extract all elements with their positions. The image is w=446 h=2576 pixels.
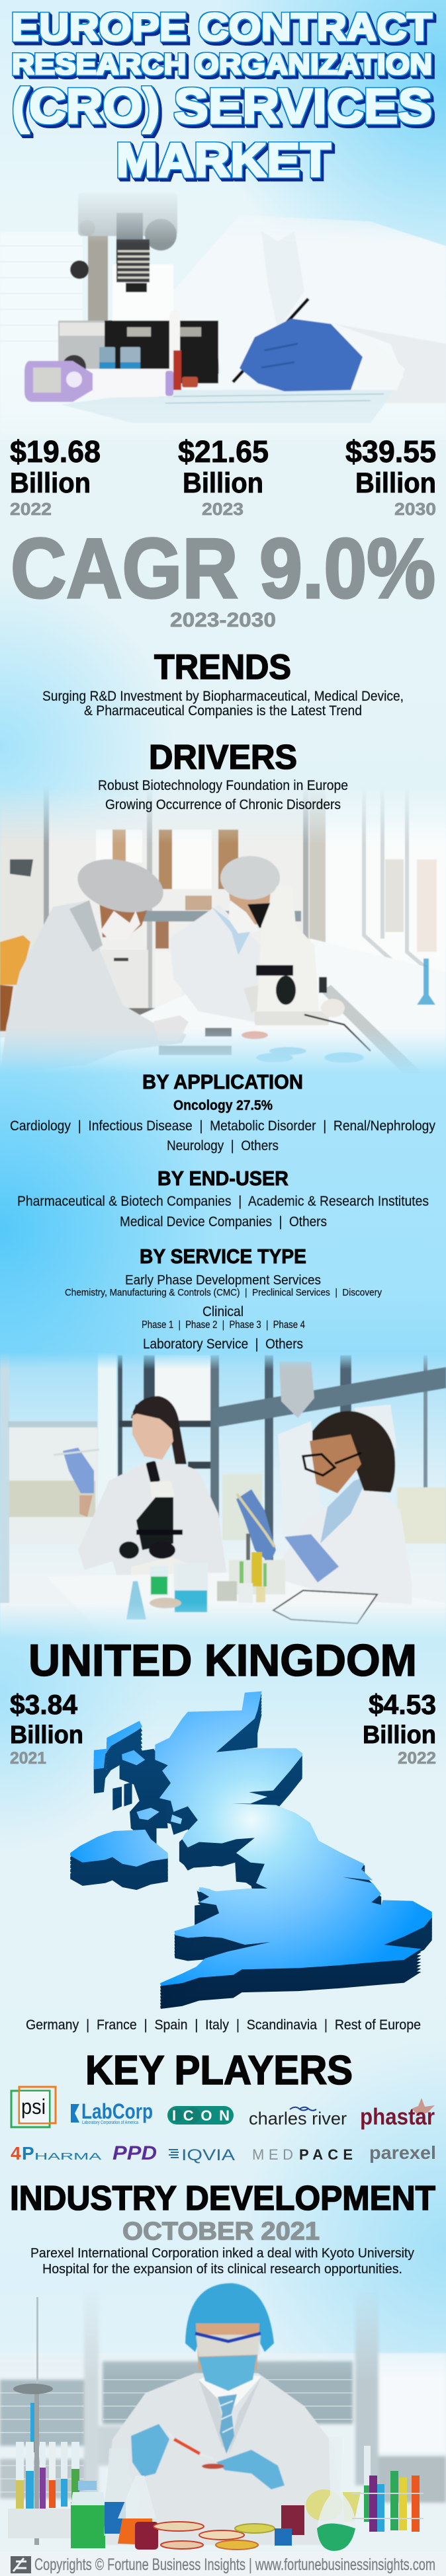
chair: [0, 935, 30, 985]
stat: 2023: [178, 434, 269, 519]
logo: 4Pharma: [11, 2143, 101, 2164]
development date: OCTOBER 2021: [122, 2218, 320, 2245]
logo: Phastar: phastar: [360, 2104, 435, 2130]
title: EUROPE CONTRACT: [11, 6, 432, 49]
logo: 4Pharma: P: [22, 2143, 34, 2164]
stat: UK 2022: 2022: [398, 1749, 436, 1768]
segment: by end-user: [17, 1167, 429, 1229]
country headline: UNITED KINGDOM: [28, 1635, 417, 1686]
segment: by end-user: Medical Device Companies | Others: [120, 1214, 327, 1229]
photo: lab technician with glassware: [0, 2283, 446, 2552]
development text: Hospital for the expansion of its clinical research opportunities.: [42, 2261, 402, 2277]
map of the United Kingdom: [70, 1692, 432, 2009]
shelving with binders: [44, 793, 308, 1015]
left glove and pipette: [131, 2424, 213, 2477]
map extrusion: [70, 1695, 432, 2009]
table: [118, 1573, 224, 1582]
stat: UK 2022: $4.53: [369, 1689, 436, 1720]
segment: by application: BY APPLICATION: [142, 1070, 303, 1093]
right glove and dish: [202, 2450, 285, 2489]
coat sleeve: [392, 365, 404, 390]
drivers: DRIVERS: [149, 738, 297, 777]
glassware: right flasks and tubes: [275, 2437, 424, 2551]
CAGR figure: 2023-2030: [170, 608, 276, 631]
beakers and test tubes: [126, 1534, 285, 1620]
stat: 2023: $21.65: [178, 434, 269, 469]
logo: LabCorp: LabCorp: [81, 2099, 153, 2123]
pen: [233, 299, 308, 382]
drivers text: Growing Occurrence of Chronic Disorders: [105, 797, 341, 812]
glassware: left flasks: [71, 2448, 158, 2550]
glassware: left tubes: [8, 2442, 79, 2538]
trends: & Pharmaceutical Companies is the Latest Trend: [84, 703, 362, 719]
left scientist head: [131, 1396, 187, 1464]
stat: UK 2022: Billion: [363, 1721, 436, 1749]
drivers text: [98, 778, 348, 812]
vials: [99, 347, 140, 369]
test tube: [169, 311, 198, 391]
woman in lab coat: [3, 859, 188, 1059]
clipboard: [61, 390, 394, 423]
logo: Medpace: PACE: [299, 2146, 353, 2163]
title: MARKET: [116, 134, 331, 187]
logo: IQVIA: [169, 2146, 235, 2164]
face: [196, 2323, 259, 2370]
logo: Medpace: [252, 2146, 353, 2163]
photo: two lab scientists at microscope: [0, 786, 446, 1077]
stat: 2030: [345, 434, 436, 519]
microscope: [118, 1460, 184, 1575]
title: RESEARCH ORGANIZATION: [12, 48, 432, 81]
right scientist gloves and pipette: [236, 1489, 339, 1582]
room background: [0, 795, 446, 1038]
industry development heading: INDUSTRY DEVELOPMENT: [10, 2179, 435, 2218]
clipboard: [273, 1590, 377, 1623]
segment: by end-user: BY END-USER: [157, 1167, 289, 1190]
logo: PPD: PPD: [112, 2142, 157, 2164]
logo: PSI: psi: [21, 2095, 46, 2119]
trends: [42, 648, 404, 719]
hairnet: [185, 2283, 274, 2352]
infrared thermometer: [24, 361, 173, 402]
lab coat: [173, 217, 446, 380]
left scientist glove and tweezers: [54, 1448, 99, 1517]
stat: UK 2021: Billion: [10, 1721, 83, 1749]
map top surface: [70, 1692, 432, 1986]
logo: Medpace: MED: [252, 2146, 293, 2163]
footer band: [0, 2552, 446, 2576]
right scientist head: [303, 1411, 395, 1493]
stat: UK 2021: [10, 1689, 83, 1768]
logo: LabCorp: Laboratory Corporation of America: [82, 2121, 138, 2125]
drivers text: Robust Biotechnology Foundation in Europe: [98, 778, 348, 793]
stat: 2023: 2023: [202, 499, 244, 519]
title: (CRO) SERVICES: [12, 79, 432, 134]
stat: UK 2021: 2021: [10, 1749, 46, 1768]
segment: by application: [10, 1070, 435, 1153]
blue glove: [240, 319, 363, 391]
man in lab coat: [169, 856, 287, 1022]
safety goggles: [195, 2333, 261, 2357]
petri dishes: [154, 2522, 275, 2550]
photo: two female scientists at lab bench: [0, 1352, 446, 1646]
trends: Surging R&D Investment by Biopharmaceutical, Medical Device,: [42, 689, 404, 704]
stat: 2022: Billion: [10, 467, 91, 499]
segment: by service type: Chemistry, Manufacturing & Controls (CMC) | Preclinical Services | Discovery: [65, 1287, 382, 1298]
development text: Parexel International Corporation inked a deal with Kyoto University: [30, 2245, 415, 2261]
logo: 4Pharma: HARMA: [34, 2151, 101, 2162]
segment: by service type: [65, 1245, 382, 1352]
segment: by service type: Early Phase Development Services: [125, 1272, 321, 1288]
segment: by service type: Clinical: [202, 1304, 244, 1319]
microscope: [255, 886, 371, 1051]
window background: [0, 1352, 446, 1643]
photo: scientist writing beside a microscope: [0, 197, 446, 419]
segment: by application: Oncology 27.5%: [173, 1098, 273, 1113]
stat: 2030: Billion: [355, 467, 436, 499]
title: [11, 6, 432, 187]
segment: by service type: Phase 1 | Phase 2 | Phase 3 | Phase 4: [142, 1319, 305, 1331]
development text: [30, 2245, 415, 2277]
stat: 2030: 2030: [394, 499, 436, 519]
stat: 2022: $19.68: [10, 434, 101, 469]
segment: by application: Neurology | Others: [167, 1138, 279, 1153]
stat: 2022: [10, 434, 101, 519]
technician coat: [99, 2373, 347, 2545]
logo: Charles River: charles river: [249, 2109, 347, 2128]
stat: 2030: $39.55: [345, 434, 436, 469]
lab background: [0, 2287, 446, 2552]
footer logo mark: [11, 2556, 31, 2573]
logo: Parexel: parexel: [369, 2142, 436, 2163]
stat: UK 2021: $3.84: [10, 1689, 78, 1720]
table: [0, 939, 446, 1057]
stand with clamp: [13, 2297, 53, 2545]
segment: by service type: BY SERVICE TYPE: [140, 1245, 306, 1268]
logo: LabCorp: [71, 2099, 153, 2125]
logo: ICON: ICON: [172, 2107, 230, 2124]
trends: TRENDS: [154, 648, 291, 687]
clipboard and petri dishes: [159, 958, 435, 1063]
logo: PSI: [11, 2087, 56, 2127]
right scientist coat: [286, 1489, 412, 1604]
left scientist coat: [78, 1459, 226, 1583]
key players heading: KEY PLAYERS: [85, 2048, 353, 2093]
stat: 2022: 2022: [10, 499, 52, 519]
stat: 2023: Billion: [183, 467, 263, 499]
segment: by service type: Laboratory Service | Others: [143, 1336, 303, 1352]
logo: IQVIA: IQVIA: [181, 2146, 235, 2164]
window blinds: [0, 231, 446, 440]
microscope: [58, 193, 218, 383]
logo: 4Pharma: 4: [11, 2143, 21, 2164]
stat: UK 2022: [363, 1689, 436, 1768]
necktie: [218, 2394, 237, 2454]
face mask: [199, 2355, 257, 2391]
